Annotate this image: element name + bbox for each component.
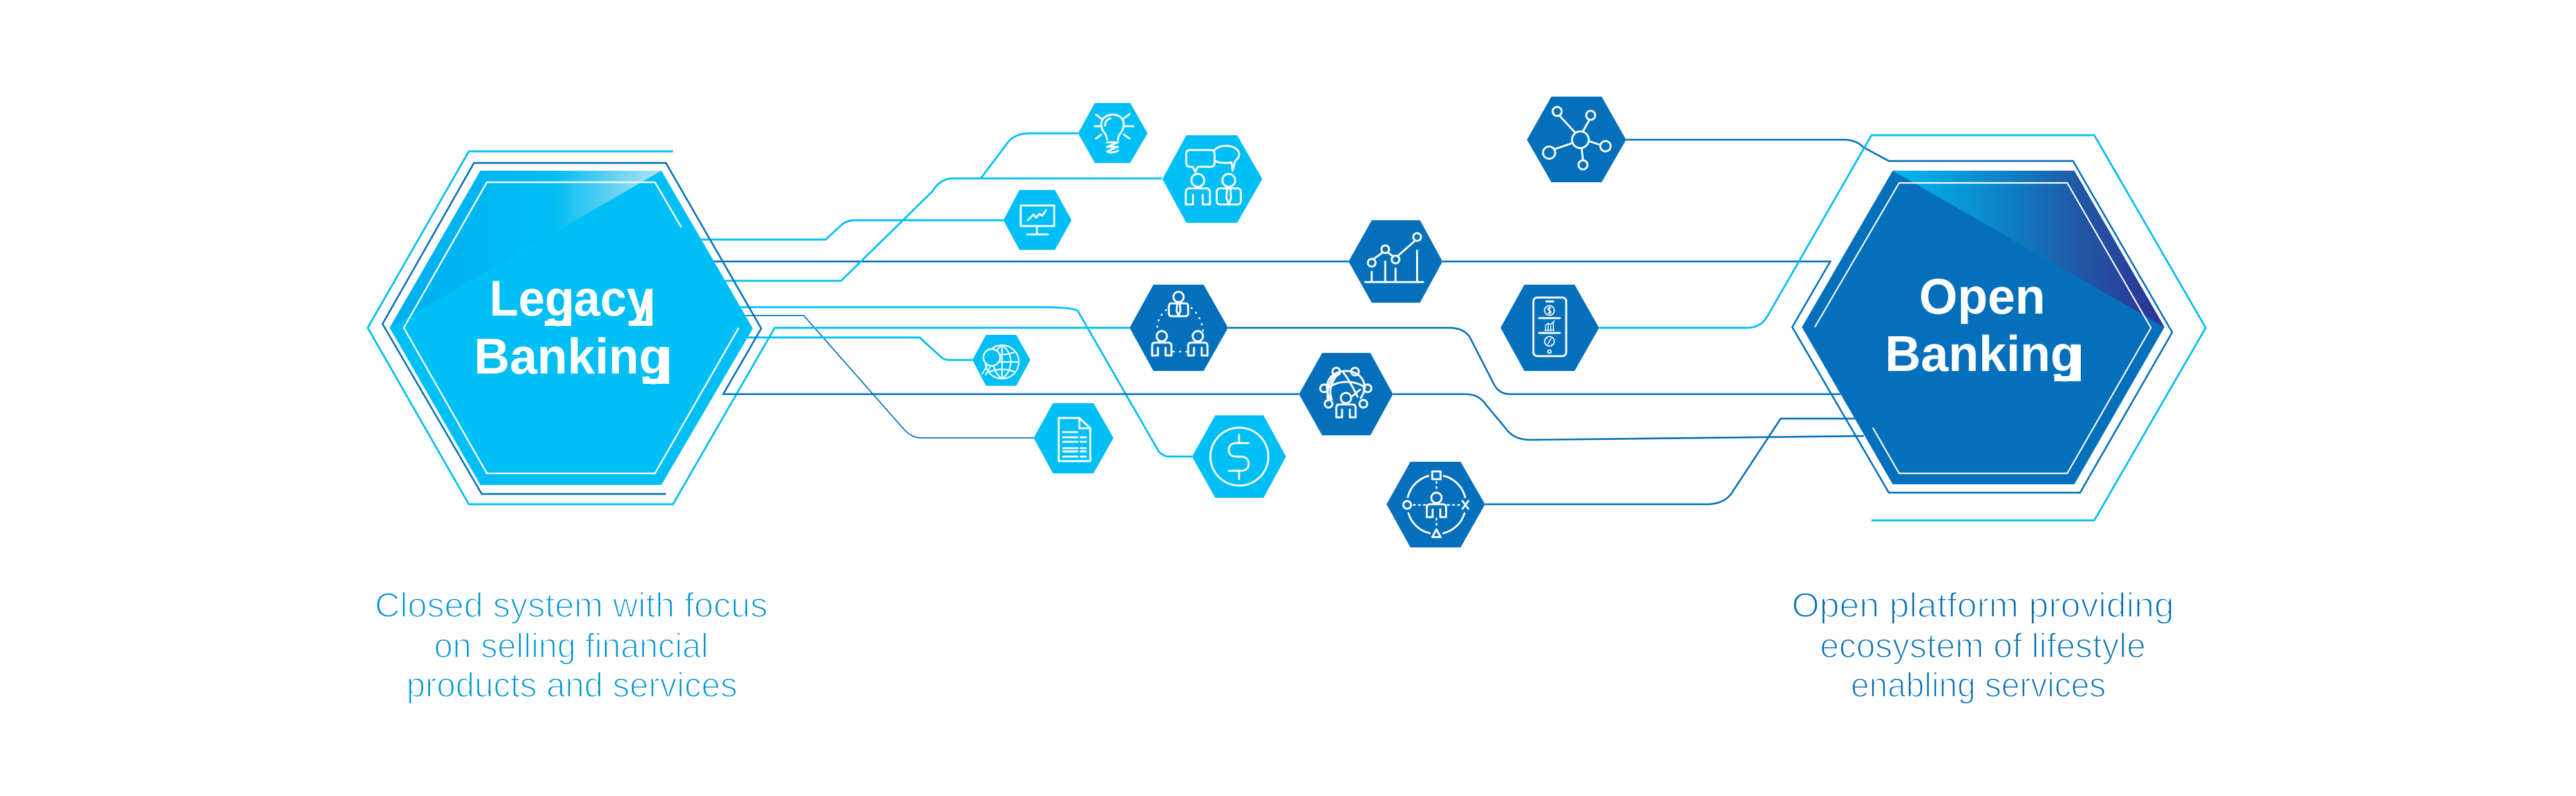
heading: Open Banking <box>1885 268 2081 382</box>
outer light outline <box>368 151 1130 504</box>
inner white outline <box>404 182 739 473</box>
icon: person with process options <box>1387 462 1485 547</box>
icon: dollar coin <box>1192 415 1286 498</box>
heading: Open Banking: Open <box>1919 268 2045 325</box>
dark outline <box>383 163 1299 494</box>
icon: monitor with chart <box>1003 190 1072 250</box>
inner white outline <box>1815 183 2151 473</box>
gloss <box>1893 171 2164 327</box>
caption: legacy banking: products and services <box>406 666 737 705</box>
heading: Legacy Banking: Banking <box>474 328 669 384</box>
icon: globe with magnifier <box>972 335 1030 386</box>
caption: open banking: enabling services <box>1851 666 2106 705</box>
caption: legacy banking: Closed system with focus <box>375 586 768 625</box>
caption: open banking: Open platform providing <box>1792 586 2174 625</box>
icon: two people talking <box>1162 135 1262 223</box>
outer light outline <box>1599 135 2206 520</box>
heading: Open Banking: Banking <box>1885 325 2081 382</box>
main hexagon <box>390 171 753 485</box>
icon: hub network <box>1527 97 1626 182</box>
main hexagon <box>1802 171 2164 484</box>
icon: light bulb <box>1078 103 1148 163</box>
panel: open banking hexagon <box>1443 135 2206 520</box>
icon: people circle <box>1130 285 1228 371</box>
icon: smartphone with finance apps <box>1501 285 1599 371</box>
caption: open banking <box>1792 586 2174 705</box>
caption: open banking: ecosystem of lifestyle <box>1820 627 2146 665</box>
icon: growth chart <box>1349 220 1443 303</box>
connector lines <box>701 133 1864 504</box>
heading: Legacy Banking: Legacy <box>489 270 653 327</box>
gloss <box>390 171 661 328</box>
icon: document <box>1034 403 1113 473</box>
panel: legacy banking hexagon <box>368 151 1299 504</box>
caption: legacy banking: on selling financial <box>434 627 708 665</box>
heading: Legacy Banking <box>474 270 669 384</box>
icon: connected person network <box>1299 353 1393 435</box>
caption: legacy banking <box>375 586 768 705</box>
connector into dark outline <box>1443 140 2172 493</box>
